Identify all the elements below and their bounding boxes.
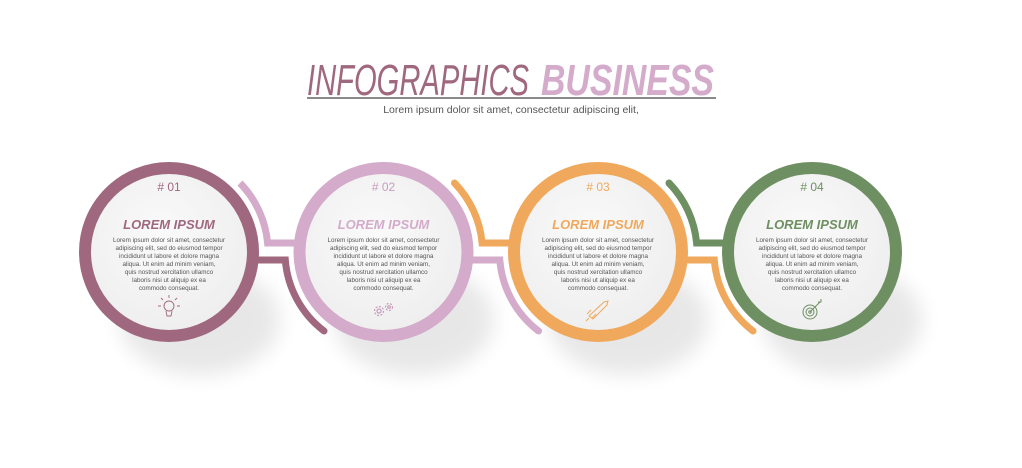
title: BUSINESS [541, 56, 714, 105]
panel: step 02: Lorem ipsum dolor sit amet, consectetur [328, 237, 440, 244]
panel: step 03: Lorem ipsum dolor sit amet, consectetur [542, 237, 654, 244]
panel: step 04: aliqua. Ut enim ad minim veniam, [765, 261, 859, 268]
panel: step 03: laboris nisi ut aliquip ex ea [561, 277, 635, 284]
connector 3-4 [669, 183, 753, 331]
panel: step 01: quis nostrud xercitation ullamco [125, 269, 214, 276]
panel: step 02: aliqua. Ut enim ad minim veniam, [337, 261, 430, 268]
icon: target [803, 299, 821, 319]
panel: step 04: Lorem ipsum dolor sit amet, consectetur [756, 237, 868, 244]
panel: step 02: quis nostrud xercitation ullamco [339, 269, 428, 276]
panel: step 02: adipiscing elit, sed do eiusmod tempor [330, 245, 437, 252]
panel: step 04: quis nostrud xercitation ullamco [768, 269, 857, 276]
panel: step 02: # 02 [372, 180, 396, 194]
icon: rocket [586, 301, 608, 321]
panel: step 02: incididunt ut labore et dolore magna [333, 253, 434, 260]
panel: step 01: incididunt ut labore et dolore magna [119, 253, 220, 260]
panel: step 04: commodo consequat. [782, 285, 842, 292]
panel: step 01: laboris nisi ut aliquip ex ea [132, 277, 206, 284]
subtitle: Lorem ipsum dolor sit amet, consectetur adipiscing elit, [383, 104, 639, 116]
panel: step 01 [85, 168, 253, 336]
panel: step 03: quis nostrud xercitation ullamco [554, 269, 643, 276]
panel: step 03: commodo consequat. [568, 285, 628, 292]
panel: step 02: laboris nisi ut aliquip ex ea [347, 277, 421, 284]
panel: step 03: incididunt ut labore et dolore magna [548, 253, 649, 260]
panel: step 01: LOREM IPSUM [123, 217, 216, 232]
connector 1-2 [240, 183, 324, 331]
panel: step 03: # 03 [586, 180, 610, 194]
panel: step 03: adipiscing elit, sed do eiusmod tempor [544, 245, 652, 252]
panel: step 04: incididunt ut labore et dolore magna [762, 253, 863, 260]
panel: step 02: LOREM IPSUM [338, 217, 431, 232]
panel: step 01: adipiscing elit, sed do eiusmod tempor [115, 245, 223, 252]
panel: step 01: Lorem ipsum dolor sit amet, consectetur [113, 237, 225, 244]
panel: step 04: LOREM IPSUM [766, 217, 859, 232]
panel: step 03: LOREM IPSUM [552, 217, 645, 232]
panel: step 01: aliqua. Ut enim ad minim veniam, [122, 261, 216, 268]
panel: step 02 [300, 168, 468, 336]
panel: step 03 [514, 168, 682, 336]
shadows [120, 265, 922, 375]
panel: step 04: adipiscing elit, sed do eiusmod tempor [758, 245, 866, 252]
panel: step 01: commodo consequat. [139, 285, 199, 292]
panel: step 03: aliqua. Ut enim ad minim veniam, [551, 261, 645, 268]
panel: step 04: # 04 [800, 180, 824, 194]
connector 2-3 [454, 183, 538, 331]
title: INFOGRAPHICS [307, 56, 529, 105]
panel: step 02: commodo consequat. [353, 285, 414, 292]
icon: bulb [158, 295, 180, 316]
panel: step 04: laboris nisi ut aliquip ex ea [775, 277, 849, 284]
panel: step 04 [728, 168, 896, 336]
panel: step 01: # 01 [157, 180, 181, 194]
icon: gears [374, 304, 392, 316]
